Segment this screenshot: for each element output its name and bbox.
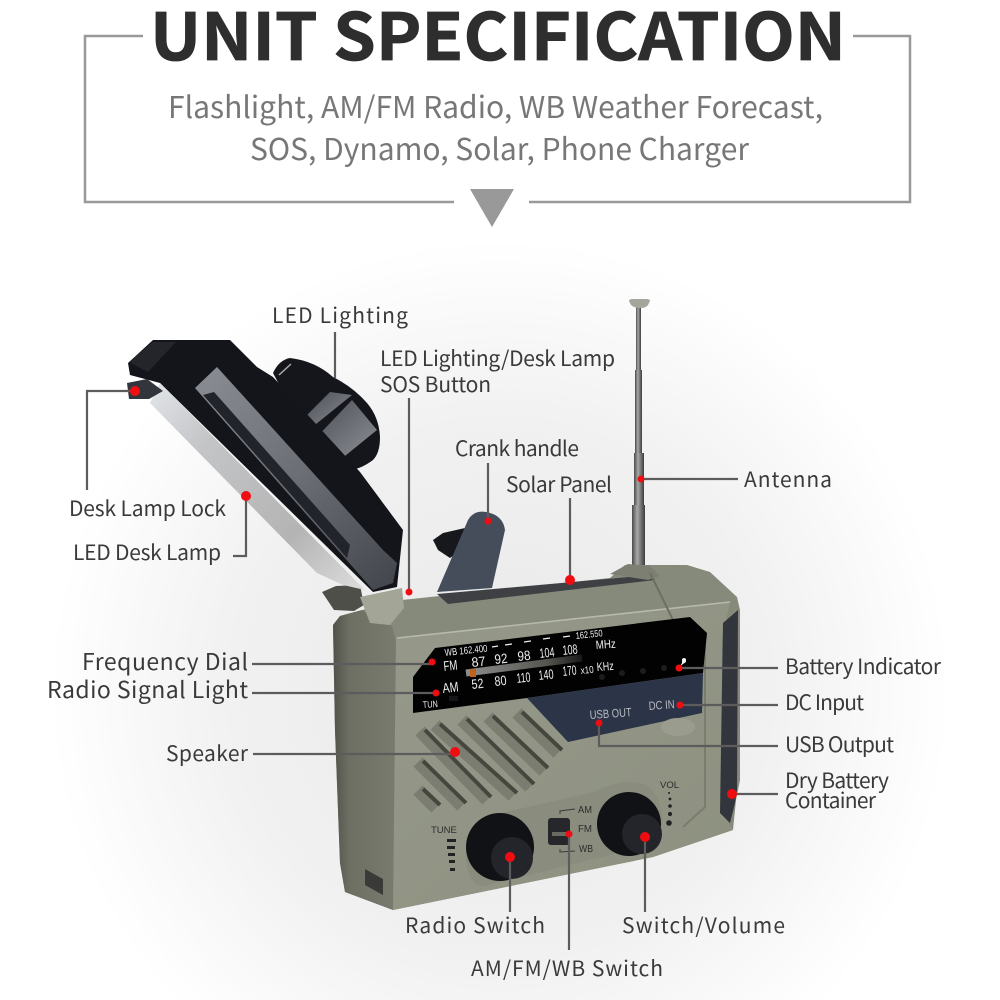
labels: LED Lighting/Desk Lamp (380, 343, 615, 373)
display text: 92 (494, 651, 508, 667)
display text: 87 (471, 654, 486, 670)
crank handle (433, 512, 505, 592)
labels: USB Output (785, 729, 894, 759)
display text: 110 (516, 670, 531, 686)
ridge highlight (397, 602, 730, 638)
subtitle: Flashlight, AM/FM Radio, WB Weather Forecast, (168, 83, 823, 127)
display text (422, 628, 616, 711)
band labels: WB (579, 843, 593, 855)
speaker grille (418, 712, 562, 808)
hinge dark (322, 585, 364, 611)
display text: KHz (596, 659, 614, 674)
left side panel (333, 610, 397, 910)
display text: MHz (595, 637, 616, 652)
lamp knob (273, 358, 380, 470)
lamp lens (150, 383, 365, 590)
labels: Dry Battery (785, 765, 889, 795)
blue panel (527, 673, 703, 742)
desk lamp (127, 340, 403, 592)
labels: Radio Signal Light (47, 671, 248, 705)
radio body (322, 564, 740, 910)
labels: Frequency Dial (82, 643, 248, 677)
left knob (466, 813, 534, 881)
panel labels: TUNE (431, 825, 457, 836)
hinge light (360, 588, 404, 625)
right side dark panel (720, 610, 738, 823)
display text: x10 (580, 665, 595, 677)
subtitle (168, 83, 823, 169)
display text: 162.550 (575, 628, 603, 642)
labels: Solar Panel (506, 469, 612, 499)
labels: LED Lighting (272, 300, 408, 330)
solar panel (437, 575, 655, 604)
band labels (578, 804, 593, 855)
display text: 108 (562, 641, 578, 658)
grey strip (195, 367, 397, 590)
display (413, 617, 707, 713)
labels: Battery Indicator (785, 651, 942, 681)
lamp lock (127, 379, 163, 399)
antenna mount and strap (610, 564, 660, 580)
labels: Crank handle (455, 433, 579, 463)
display text: 52 (471, 676, 484, 692)
display text: TUN (422, 699, 438, 711)
subtitle: SOS, Dynamo, Solar, Phone Charger (250, 125, 749, 169)
display text: AM (442, 678, 459, 696)
labels: Speaker (166, 738, 249, 768)
labels: DC Input (785, 687, 864, 717)
band labels: AM (578, 804, 592, 816)
right knob (597, 792, 662, 856)
band marks (560, 809, 575, 852)
display text: 98 (517, 648, 531, 664)
icon: down triangle (470, 189, 514, 227)
labels: AM/FM/WB Switch (471, 953, 663, 983)
foot slot (365, 869, 383, 895)
labels: Desk Lamp Lock (69, 493, 226, 523)
display text: 104 (539, 644, 556, 661)
labels (47, 300, 942, 983)
antenna (629, 299, 650, 567)
display text: FM (443, 657, 458, 674)
panel labels (431, 780, 679, 836)
labels: Radio Switch (405, 910, 545, 940)
port labels (589, 697, 675, 722)
labels: Antenna (744, 464, 832, 494)
header frame (85, 36, 910, 202)
display text: 140 (538, 666, 554, 683)
callout dots (130, 386, 737, 862)
display text: WB 162.400 (444, 644, 488, 659)
band switch (548, 818, 570, 845)
callout lines (87, 332, 778, 950)
labels: SOS Button (380, 369, 491, 399)
indicator lights (449, 665, 667, 701)
display text: 170 (562, 663, 577, 679)
port labels: DC IN (648, 697, 675, 713)
knob recess (466, 782, 662, 886)
battery icon (680, 658, 686, 666)
tuning bar (466, 658, 582, 677)
port labels: USB OUT (589, 705, 633, 722)
lamp housing (128, 340, 403, 592)
band labels: FM (578, 823, 592, 835)
display text: 80 (494, 673, 507, 689)
front panel (393, 602, 733, 910)
body silhouette (333, 565, 740, 910)
front inner ridge (683, 640, 705, 827)
labels: Container (785, 785, 877, 815)
level marks (447, 792, 672, 871)
labels: LED Desk Lamp (73, 537, 221, 567)
labels: Switch/Volume (622, 910, 785, 940)
panel labels: VOL (660, 780, 679, 791)
